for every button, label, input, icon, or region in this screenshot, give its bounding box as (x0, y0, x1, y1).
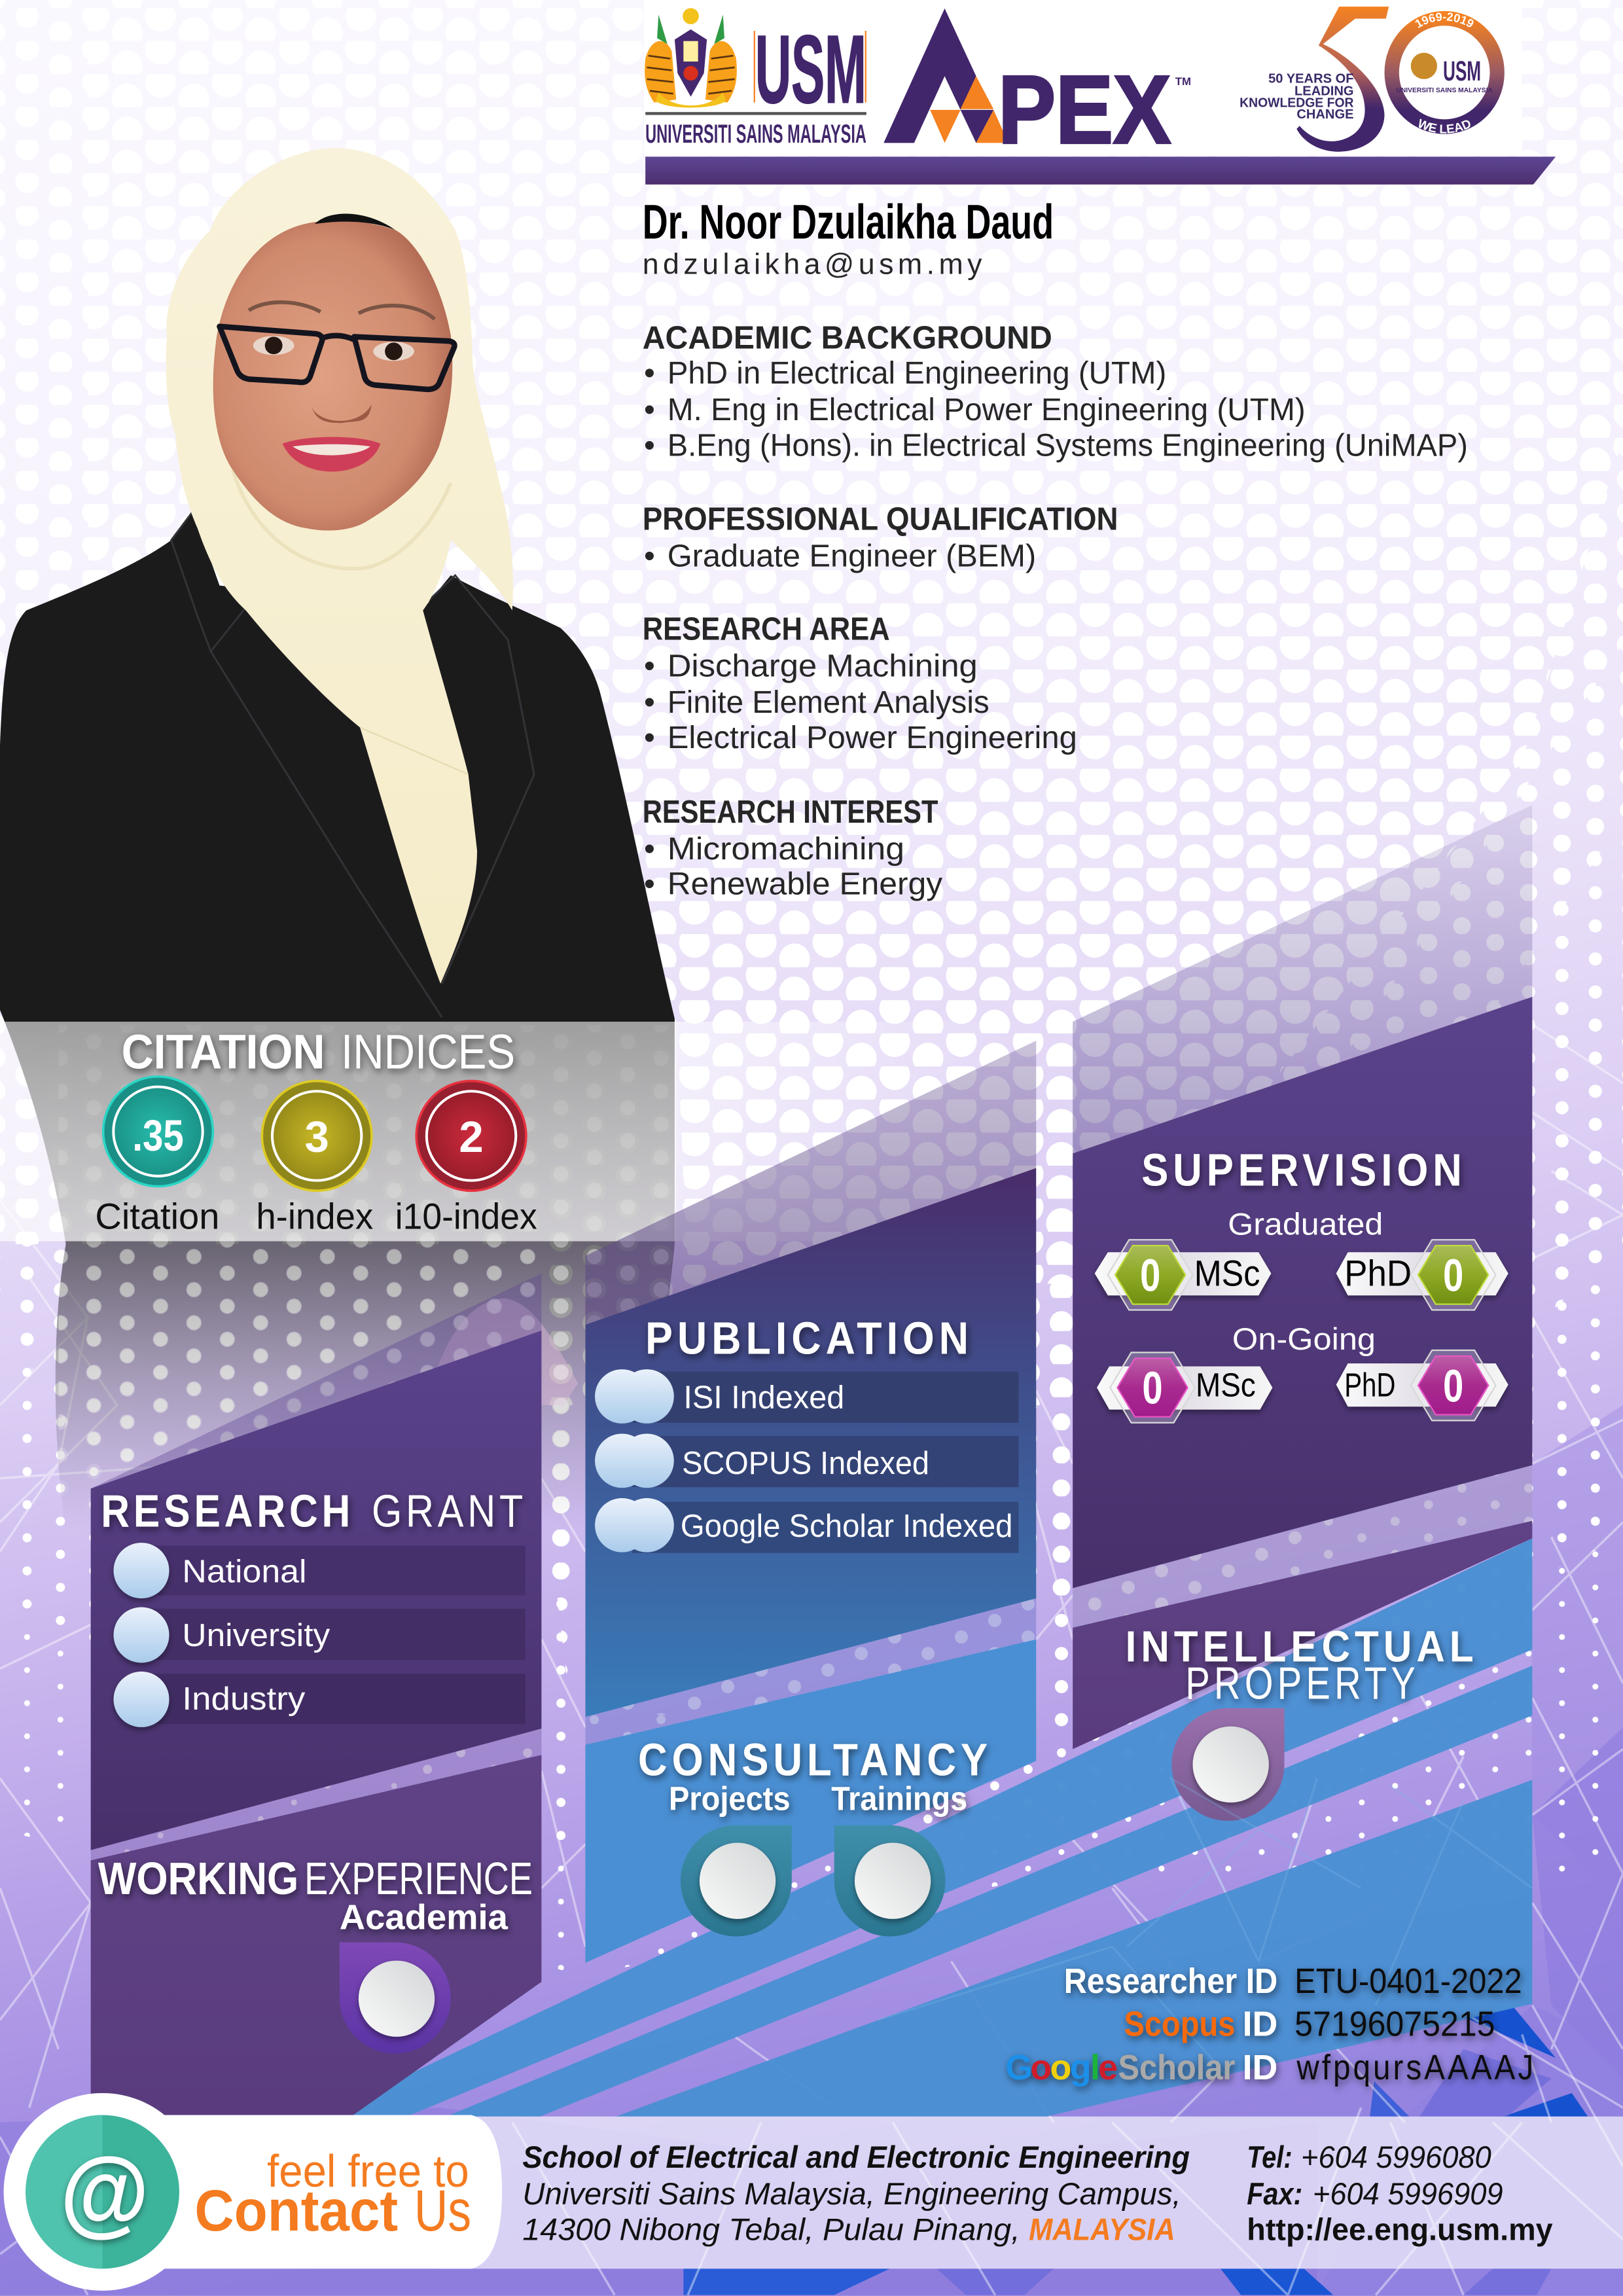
faded panel caps (91, 805, 1532, 1488)
professional qualification: • (644, 539, 655, 574)
contact details: http://ee.eng.usm.my (1247, 2212, 1553, 2247)
badge: graduated PhD: PhD (1344, 1253, 1412, 1294)
research grant heading: GRANT (372, 1486, 527, 1537)
badge: on-going MSc (1097, 1352, 1272, 1423)
dots over lower body (59, 1097, 669, 1479)
google scholar id: ID (1243, 2048, 1277, 2087)
google scholar id: g (1070, 2048, 1091, 2087)
google scholar id (1005, 2048, 1536, 2087)
badge: graduated MSc: MSc (1194, 1253, 1260, 1294)
consultancy sub-labels: Projects (669, 1779, 791, 1817)
academic background: ACADEMIC BACKGROUND (643, 319, 1052, 355)
google scholar id: G (1005, 2048, 1033, 2087)
logo: 50 years: 50 YEARS OF (1268, 71, 1354, 86)
intellectual property heading (1126, 1622, 1478, 1709)
panel: intellectual property (1073, 1521, 1532, 1821)
research area: Finite Element Analysis (668, 685, 990, 720)
research interest: RESEARCH INTEREST (643, 794, 938, 830)
USM letters: USM (755, 16, 866, 124)
logo: 50 years: WE LEAD (1419, 118, 1471, 134)
research area: Electrical Power Engineering (668, 720, 1077, 755)
purple header bar (645, 156, 1556, 185)
citation heading (122, 1025, 515, 1079)
jacket lapels (171, 511, 534, 1017)
research area: • (644, 685, 655, 720)
google scholar id: wfpqursAAAAJ (1296, 2048, 1536, 2087)
badge: on-going PhD: 0 (1443, 1360, 1463, 1411)
working experience heading: EXPERIENCE (304, 1853, 533, 1904)
research area: • (644, 648, 655, 683)
research area (643, 611, 1077, 755)
academic background: B.Eng (Hons). in Electrical Systems Engineering (UniMAP) (668, 428, 1468, 463)
overlay strips between panels (91, 1465, 1532, 1860)
logo: APEX: PEX (998, 56, 1171, 164)
logo: 50 years: UNIVERSITI SAINS MALAYSIA (1396, 87, 1493, 94)
logo: APEX: TM (1175, 75, 1191, 88)
research interest: Renewable Energy (668, 866, 942, 901)
research interest (643, 794, 942, 901)
row: Google Scholar indexed (595, 1498, 1018, 1553)
research grant heading: RESEARCH (101, 1486, 354, 1537)
on-going label: On-Going (1232, 1321, 1376, 1356)
panel: research grant (91, 1331, 541, 2117)
row: industry (114, 1672, 526, 1727)
badge: h-index: 3 (304, 1113, 329, 1162)
school address: MALAYSIA (1029, 2212, 1175, 2247)
glasses (219, 327, 455, 389)
badge labels: h-index (256, 1196, 373, 1237)
email: ndzulaikha@usm.my (643, 248, 982, 280)
underscarf (315, 213, 395, 230)
school address: School of Electrical and Electronic Engineering (522, 2140, 1190, 2174)
academic background: • (644, 392, 655, 427)
working experience heading: Academia (340, 1897, 508, 1937)
row: ISI indexed: ISI Indexed (683, 1379, 844, 1415)
lines over blue bands (878, 1778, 1532, 2079)
scopus id: 57196075215 (1294, 2005, 1495, 2044)
logo: 50 years: CHANGE (1296, 107, 1354, 122)
intellectual property drop counter (1171, 1708, 1285, 1821)
jacket (0, 511, 675, 1530)
badge labels: i10-index (395, 1196, 537, 1237)
badge labels: Citation (95, 1196, 219, 1237)
professional qualification: Graduate Engineer (BEM) (668, 539, 1036, 574)
school address (522, 2140, 1190, 2247)
university name: UNIVERSITI SAINS MALAYSIA (645, 119, 866, 149)
google scholar id: e (1098, 2048, 1118, 2087)
academic background: • (644, 428, 655, 463)
row: industry: Industry (182, 1681, 306, 1717)
eyebrows and eyes (249, 302, 435, 361)
school address: Universiti Sains Malaysia, Engineering Campus, (522, 2176, 1181, 2211)
face (213, 221, 452, 531)
working experience heading (98, 1853, 533, 1937)
logo: 50 years: USM (1443, 56, 1481, 87)
graduated label: Graduated (1228, 1207, 1383, 1242)
researcher id (1064, 1962, 1522, 2001)
research grant heading (101, 1486, 527, 1537)
research interest: • (644, 831, 655, 867)
badge: graduated PhD (1336, 1240, 1508, 1310)
research area: • (644, 720, 655, 755)
google scholar id: l (1090, 2048, 1100, 2087)
row: national: National (182, 1553, 306, 1589)
google scholar id: Scholar (1118, 2048, 1235, 2087)
white circle (4, 2093, 201, 2291)
panel: publication (585, 1168, 1036, 1717)
research interest: Micromachining (668, 831, 904, 867)
intellectual property heading: PROPERTY (1185, 1658, 1419, 1709)
researcher id: ETU-0401-2022 (1294, 1962, 1522, 2001)
logo: 50 years: 1969-2019 (1415, 12, 1474, 28)
contact badge (4, 2093, 502, 2291)
citation heading: CITATION (122, 1025, 325, 1079)
row: SCOPUS indexed (595, 1434, 1018, 1488)
badge: h-index (262, 1081, 372, 1191)
scopus id: Scopus (1124, 2005, 1235, 2044)
professional qualification: PROFESSIONAL QUALIFICATION (643, 501, 1118, 537)
name: Dr. Noor Dzulaikha Daud (643, 195, 1054, 249)
panel: citation indices (0, 1022, 1026, 1241)
blue diagonal bands (321, 1538, 1532, 2117)
badge: i10-index (416, 1081, 526, 1191)
row: SCOPUS indexed: SCOPUS Indexed (682, 1445, 929, 1481)
research area: Discharge Machining (668, 648, 978, 683)
academic background: M. Eng in Electrical Power Engineering (UTM) (668, 392, 1306, 427)
badge labels (95, 1196, 537, 1237)
consultancy heading: CONSULTANCY (638, 1734, 992, 1785)
badge: i10-index: 2 (459, 1113, 484, 1162)
panel: supervision (1073, 997, 1532, 1588)
badge: on-going PhD (1336, 1350, 1508, 1420)
row: Google Scholar indexed: Google Scholar Indexed (681, 1508, 1012, 1544)
logo: APEX (883, 9, 1191, 164)
projects drop counter (681, 1825, 792, 1937)
footer band (439, 2117, 1623, 2269)
panel: consultancy (585, 1640, 1036, 1963)
contact details: Fax: (1247, 2176, 1302, 2211)
research area: RESEARCH AREA (643, 611, 890, 647)
badge: citation count (103, 1077, 213, 1187)
google scholar id: o (1050, 2048, 1071, 2087)
consultancy sub-labels (669, 1779, 967, 1817)
badge: graduated MSc (1095, 1240, 1271, 1310)
row: university: University (182, 1617, 330, 1653)
logo: 50 years (1240, 7, 1505, 152)
academia drop counter (340, 1943, 451, 2054)
contact message: Us (414, 2178, 471, 2243)
google scholar id: o (1030, 2048, 1052, 2087)
blurred hand (432, 1299, 578, 1405)
contact details: Tel: (1247, 2140, 1293, 2174)
researcher id: Researcher ID (1064, 1962, 1277, 2001)
logo: 50 years: KNOWLEDGE FOR (1240, 96, 1354, 110)
professional qualification (643, 501, 1118, 574)
researcher identifiers (1005, 1962, 1536, 2087)
academic background: • (644, 355, 655, 391)
supervision heading: SUPERVISION (1141, 1144, 1467, 1195)
academic background: PhD in Electrical Engineering (UTM) (668, 355, 1166, 391)
citation heading: INDICES (341, 1025, 515, 1079)
contact message: Contact (194, 2178, 398, 2243)
row: national (114, 1543, 526, 1598)
profile text (643, 195, 1468, 901)
scopus id: ID (1243, 2005, 1277, 2044)
row: university (114, 1607, 526, 1662)
badge: on-going MSc: 0 (1142, 1363, 1163, 1414)
badge: on-going PhD: PhD (1344, 1365, 1395, 1403)
publication heading: PUBLICATION (645, 1313, 973, 1364)
consultancy sub-labels: Trainings (831, 1779, 967, 1817)
academic background (643, 319, 1468, 463)
lips (283, 437, 380, 471)
contact details: +604 5996909 (1313, 2176, 1503, 2211)
green circle with at sign (26, 2115, 179, 2269)
contact details: +604 5996080 (1301, 2140, 1491, 2174)
badge: graduated MSc: 0 (1140, 1249, 1160, 1300)
contact message (194, 2145, 471, 2243)
green circle with at sign: @ (60, 2138, 149, 2246)
contact details (1247, 2140, 1553, 2247)
hijab (166, 148, 513, 984)
trainings drop counter (834, 1825, 946, 1937)
logo: 50 years: LEADING (1294, 84, 1354, 98)
white logo backdrop (644, 0, 1522, 155)
scopus id (1124, 2005, 1495, 2044)
portrait photo (0, 148, 681, 1530)
badge: on-going MSc: MSc (1196, 1365, 1256, 1403)
research interest: • (644, 866, 655, 901)
row: ISI indexed (595, 1369, 1018, 1424)
crest (645, 8, 737, 107)
white pill (103, 2115, 502, 2269)
school address: 14300 Nibong Tebal, Pulau Pinang, (522, 2212, 1020, 2247)
nose (312, 404, 372, 423)
intellectual property heading: INTELLECTUAL (1126, 1622, 1478, 1671)
contact message: feel free to (267, 2145, 469, 2197)
badge: citation count: .35 (132, 1111, 184, 1160)
badge: graduated PhD: 0 (1443, 1249, 1463, 1300)
working experience heading: WORKING (98, 1853, 298, 1904)
logo: USM crest and wordmark (645, 8, 866, 149)
